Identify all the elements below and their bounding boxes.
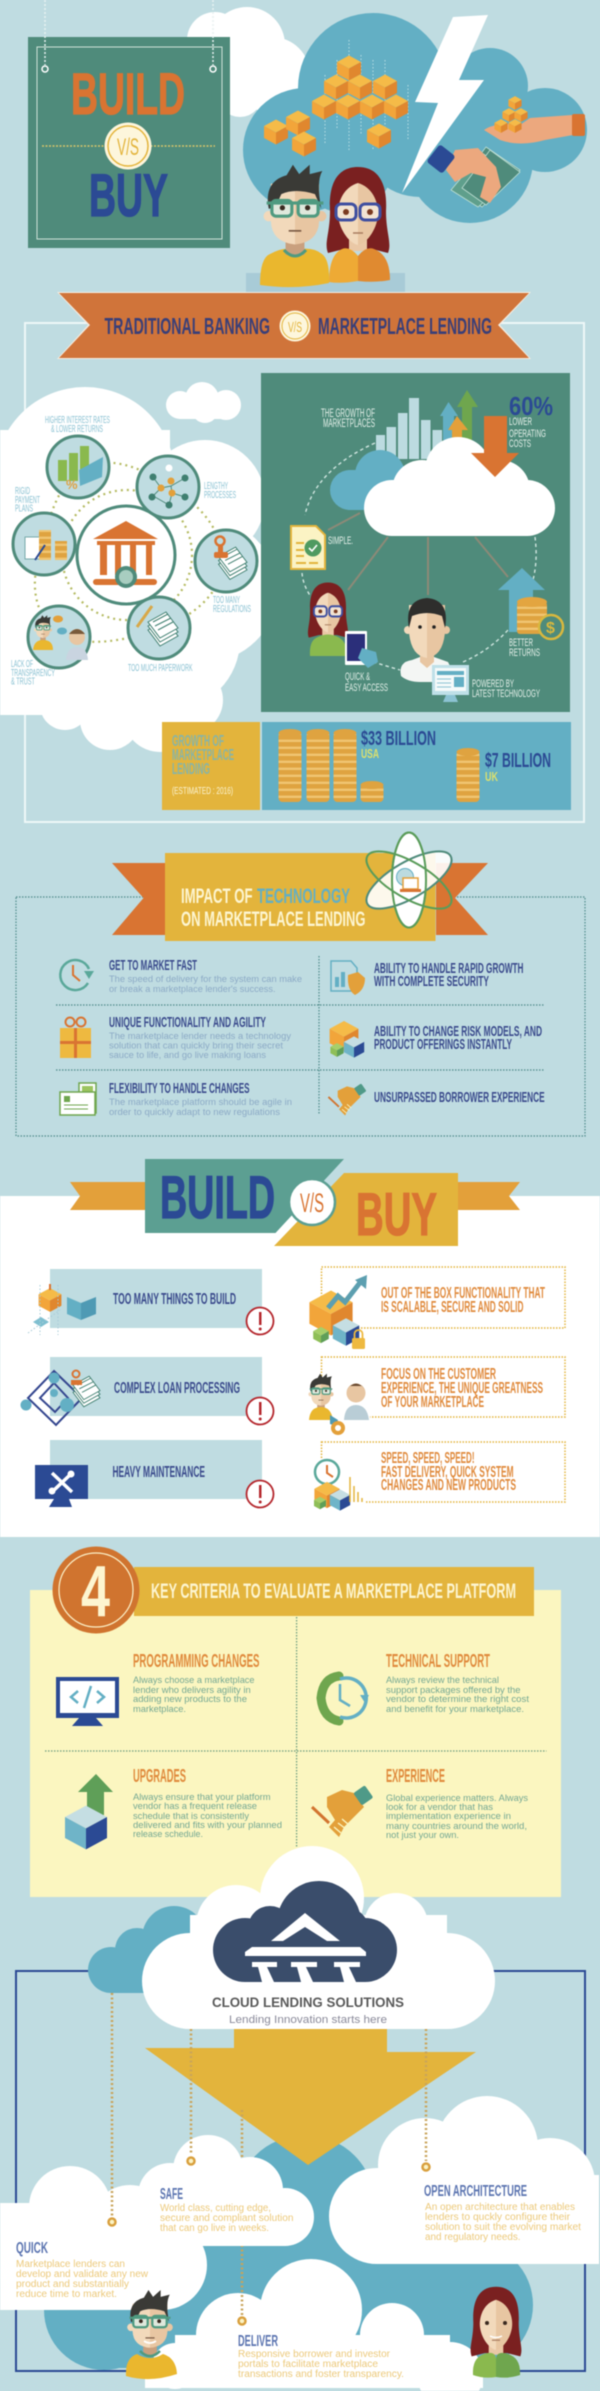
icon: rising rates: % [66,477,78,492]
white cloud [364,437,555,536]
stat: 60 percent: 60% [509,391,553,421]
criterion: programming changes: Always choose a marketplace [133,1675,254,1686]
label: growth of marketplaces: MARKETPLACES [323,418,375,430]
man avatar [260,165,329,287]
small blue cloud [88,1906,211,1993]
build item: too many things [28,1269,274,1335]
build vs buy header: V/S [300,1188,324,1218]
cloud shape [0,2166,207,2310]
panel: growth label: MARKETPLACE [172,747,234,764]
dividers [56,956,545,1115]
panel: growth label: (ESTIMATED : 2016) [172,785,233,797]
label: too many regulations: REGULATIONS [213,604,251,615]
stat: 33 billion USA [361,728,436,761]
woman with tablet [308,583,378,668]
label: lack of transparency: TRANSPARENCY [11,668,55,679]
large blue backdrop cloud [44,2135,533,2370]
label: quick and easy access: EASY ACCESS [345,682,388,694]
impact ribbon: IMPACT OF [181,885,253,908]
icon: payment plan and coins [13,513,75,575]
criterion: technical support: vendor to determine the right cost [386,1694,529,1705]
label: too many regulations [213,595,251,615]
stat: 60 percent [509,391,553,450]
key criteria header: 4 [81,1552,110,1632]
icon: box with growth arrow [309,1275,367,1349]
central bank icon [77,506,175,604]
label: simple: SIMPLE. [328,535,353,547]
criterion: programming changes: marketplace. [133,1704,186,1715]
cloud: deliver: transactions and foster transparency. [238,2369,404,2380]
label: lengthy processes [204,481,236,501]
dashed arc [302,443,536,670]
dotted connecting rings [35,462,226,642]
ribbon banner: V/S [288,319,302,336]
cream panel: key criteria [30,1590,561,1897]
icon: arrow and cube [65,1774,113,1849]
cloud: deliver: portals to facilitate marketplace [238,2359,378,2370]
label: powered by latest technology: POWERED BY [472,678,514,690]
item: unique functionality: The marketplace lender needs a technology [109,1031,292,1041]
panel: marketplace lending [261,373,570,712]
cloud: deliver: Responsive borrower and investor [238,2349,391,2360]
cloud: safe: SAFE [160,2186,183,2203]
dividers [45,1617,546,1847]
build vs buy header: BUY [356,1181,437,1248]
dotted panel: impact of technology [16,897,585,1136]
white cloud [142,1846,495,2029]
buy item: out of the box [309,1267,565,1349]
icon: diamond network and stack [20,1370,100,1425]
ribbon banner: MARKETPLACE LENDING [318,313,492,339]
criterion: upgrades: Always ensure that your platform [133,1792,271,1803]
open hand with cubes [484,96,585,144]
item: unique functionality: UNIQUE FUNCTIONALITY AND AGILITY [109,1014,266,1031]
item: rapid growth with security: WITH COMPLETE SECURITY [374,973,489,990]
build vs buy header [70,1159,520,1248]
panel: growth coin chart [262,722,571,810]
label: growth of marketplaces: THE GROWTH OF [321,408,375,420]
navy frame [16,1971,585,2371]
growth arrows [440,390,478,450]
connector [422,2029,430,2170]
icon: shield document [331,961,365,995]
cloud: safe: secure and compliant solution [160,2213,294,2224]
item: borrower experience [328,1083,545,1116]
icon: handshake [328,1083,366,1116]
cloud: deliver [145,2259,483,2391]
icon: documents [60,1083,96,1115]
key criteria header [52,1546,534,1634]
item: flexibility [60,1080,292,1117]
item: get to market fast: GET TO MARKET FAST [109,957,197,974]
stat: 60 percent: COSTS [509,438,531,450]
criterion: upgrades: UPGRADES [133,1766,186,1786]
icon: atom with laptop [358,832,460,928]
title panel: BUY [89,162,168,229]
people base [246,273,405,293]
icon: customers with badge [308,1374,370,1435]
criterion: experience: look for a vendor that has [386,1802,493,1813]
orange down arrow [471,416,519,477]
main logo cloud: Lending Innovation starts here [229,2014,387,2026]
panel: growth label: GROWTH OF [172,733,224,750]
blue cloud [330,450,405,510]
small white cloud [166,382,241,423]
buy item: speed: SPEED, SPEED, SPEED! [381,1450,474,1467]
stat: 7 billion UK: $7 BILLION [485,750,551,772]
cloud: quick: reduce time to market. [16,2289,117,2300]
label: growth of marketplaces [321,408,375,430]
criterion: experience: Global experience matters. Always [386,1793,528,1804]
ribbon banner [57,292,531,359]
cloud: quick [0,1993,207,2310]
criterion: technical support: support packages offered by the [386,1685,520,1696]
criterion: upgrades: vendor has a frequent release [133,1801,257,1812]
large left white cloud [0,387,277,752]
coin stacks: USA [278,729,384,802]
criterion: programming changes [56,1651,260,1726]
cloud: open architecture [329,2029,599,2264]
main logo cloud [142,1846,495,2029]
thought cloud [243,13,587,223]
criterion: programming changes: PROGRAMMING CHANGES [133,1651,260,1671]
stat: 7 billion UK: UK [485,769,498,784]
icon: clock, box and bars [308,1458,366,1511]
criterion: upgrades [65,1766,282,1849]
icon: clock [60,960,94,990]
build item: complex loan processing: COMPLEX LOAN PROCESSING [114,1380,240,1397]
hand with money [426,144,520,207]
stat: 60 percent: LOWER [509,416,532,428]
white section background [0,1196,600,1537]
criterion: technical support: Always review the technical [386,1675,499,1686]
item: get to market fast [60,957,302,994]
icon: people talking [28,606,90,668]
item: unique functionality: sauce to life, and go live making loans [109,1050,267,1060]
bottom man avatar [126,2290,177,2379]
criterion: experience: EXPERIENCE [386,1766,445,1786]
label: lengthy processes: LENGTHY [204,481,228,492]
cloud: quick: Marketplace lenders can [16,2259,125,2270]
criterion: technical support: TECHNICAL SUPPORT [386,1651,490,1671]
criterion: experience [312,1766,528,1841]
connector [238,2295,246,2324]
criterion: programming changes: adding new products to the [133,1694,247,1705]
icon: phone and clock [321,1676,369,1721]
title panel [28,0,230,248]
cloud: quick: QUICK [16,2240,48,2257]
item: change risk models [330,1021,542,1058]
cloud: quick: product and substantially [16,2279,129,2290]
panel: growth label [162,722,260,810]
label: better returns: BETTER [509,637,533,649]
main logo cloud: CLOUD LENDING SOLUTIONS [212,1994,404,2010]
stat: 60 percent: OPERATING [509,428,546,440]
ribbon banner: TRADITIONAL BANKING [104,313,270,339]
icon: warning [246,1308,274,1334]
woman avatar [327,167,390,283]
item: unique functionality: solution that can quickly bring their secret [109,1040,284,1050]
logo mark [213,1881,397,1982]
cloud shape [145,2259,483,2391]
label: lack of transparency: & TRUST [11,676,35,688]
connector [108,1993,116,2226]
cloud: open architecture: An open architecture that enables [425,2202,575,2213]
icon: better returns arrow and coins: $ [546,620,555,637]
icon: warning [246,1480,274,1508]
label: rigid payment plans: PLANS [15,504,33,514]
icon: rising rates [47,436,109,498]
icon: building blocks [330,1021,364,1058]
criterion: upgrades: delivered and fits with your planned [133,1820,282,1831]
dotted line to deliver behind safe cloud [241,2110,243,2316]
item: unique functionality [60,1014,292,1060]
cloud: open architecture: and regulatory needs. [425,2232,520,2243]
item: flexibility: The marketplace platform should be agile in [109,1097,292,1107]
label: rigid payment plans [15,486,40,514]
icon: document with check [291,526,325,569]
criterion: upgrades: release schedule. [133,1829,203,1840]
label: lack of transparency [11,659,55,688]
label: higher interest rates: & LOWER RETURNS [51,424,103,435]
cloud shape [138,2135,314,2246]
cube pyramid [264,40,408,156]
stat: 33 billion USA: $33 BILLION [361,728,436,750]
item: flexibility: FLEXIBILITY TO HANDLE CHANGES [109,1080,250,1097]
panel: traditional banking problems [11,415,257,688]
label: quick and easy access [345,671,388,694]
bottom woman avatar [471,2287,521,2378]
label: powered by latest technology [472,678,540,700]
label: higher interest rates: HIGHER INTEREST RATES [45,415,110,426]
cloud: open architecture: solution to suit the evolving market [425,2222,581,2233]
label: lack of transparency: LACK OF [11,659,33,670]
label: too many regulations: TOO MANY [213,595,240,606]
criterion: technical support: and benefit for your marketplace. [386,1704,524,1715]
icon: monitor with tools [35,1465,88,1507]
icon: warning [246,1398,274,1424]
coin stack: UK [456,748,480,802]
lightning bolt [402,15,488,193]
growth bars [376,398,442,459]
build item: complex loan processing [20,1357,274,1425]
icon: handshake [312,1785,373,1837]
yellow down arrow [145,2029,476,2165]
criterion: programming changes: lender who delivers agility in [133,1685,251,1696]
icon: better returns arrow and coins [498,568,563,639]
cloud: open architecture: lenders to quckly configure their [425,2212,571,2223]
buy item: focus on customer [308,1357,565,1435]
icon: code monitor [56,1677,119,1726]
criterion: technical support [321,1651,529,1721]
impact ribbon [112,853,488,941]
cloud: quick: develop and validate any new [16,2269,149,2280]
criterion: experience: implementation experience in [386,1811,511,1822]
stat: 7 billion UK [485,750,551,784]
frame: banking comparison [25,323,584,822]
connector lines [328,513,508,595]
white cloud behind title [187,7,310,117]
criterion: experience: many countries around the world, [386,1821,527,1832]
label: rigid payment plans: RIGID [15,486,30,497]
title panel: V/S [117,134,139,161]
cloud: open architecture: OPEN ARCHITECTURE [424,2183,527,2200]
icon: gift [60,1018,91,1058]
cloud shape [329,2096,599,2264]
stat: 33 billion USA: USA [361,746,379,761]
label: lengthy processes: PROCESSES [204,490,236,501]
impact ribbon: ON MARKETPLACE LENDING [181,908,366,931]
icon: cube and book [28,1284,96,1335]
panel: growth label: LENDING [172,761,210,778]
label: rigid payment plans: PAYMENT [15,495,40,506]
cloud: safe: that can go live in weeks. [160,2223,269,2234]
impact ribbon: TECHNOLOGY [257,885,350,908]
item: get to market fast: or break a marketplace lender's success. [109,984,276,994]
icon: paperwork [128,597,190,659]
connector [188,2029,194,2164]
label: too much paperwork: TOO MUCH PAPERWORK [128,663,193,674]
label: better returns: RETURNS [509,647,540,659]
buy item: focus on customer: OF YOUR MARKETPLACE [381,1394,484,1411]
criterion: upgrades: schedule that is consistently [133,1811,249,1822]
build vs buy header: BUILD [160,1164,275,1231]
label: better returns [509,637,540,659]
item: flexibility: order to quickly adapt to new regulations [109,1107,281,1117]
buy item: speed [308,1442,565,1511]
cloud: safe [138,2029,314,2246]
build item: heavy maintenance: HEAVY MAINTENANCE [112,1464,205,1481]
man with monitor [400,598,469,702]
build item: heavy maintenance [35,1440,274,1508]
label: quick and easy access: QUICK & [345,671,370,683]
criterion: experience: not just your own. [386,1830,459,1841]
item: get to market fast: The speed of delivery for the system can make [109,974,302,984]
cloud: safe: World class, cutting edge, [160,2203,271,2214]
icon: stamp and documents [195,530,257,592]
cloud: deliver: DELIVER [238,2333,278,2350]
build item: too many things: TOO MANY THINGS TO BUILD [113,1291,236,1308]
buy item: focus on customer: FOCUS ON THE CUSTOMER [381,1366,496,1383]
icon: network [137,456,199,518]
title panel: BUILD [71,62,185,127]
label: powered by latest technology: LATEST TECHNOLOGY [472,688,540,700]
label: higher interest rates [45,415,110,435]
item: rapid growth with security [331,960,524,995]
